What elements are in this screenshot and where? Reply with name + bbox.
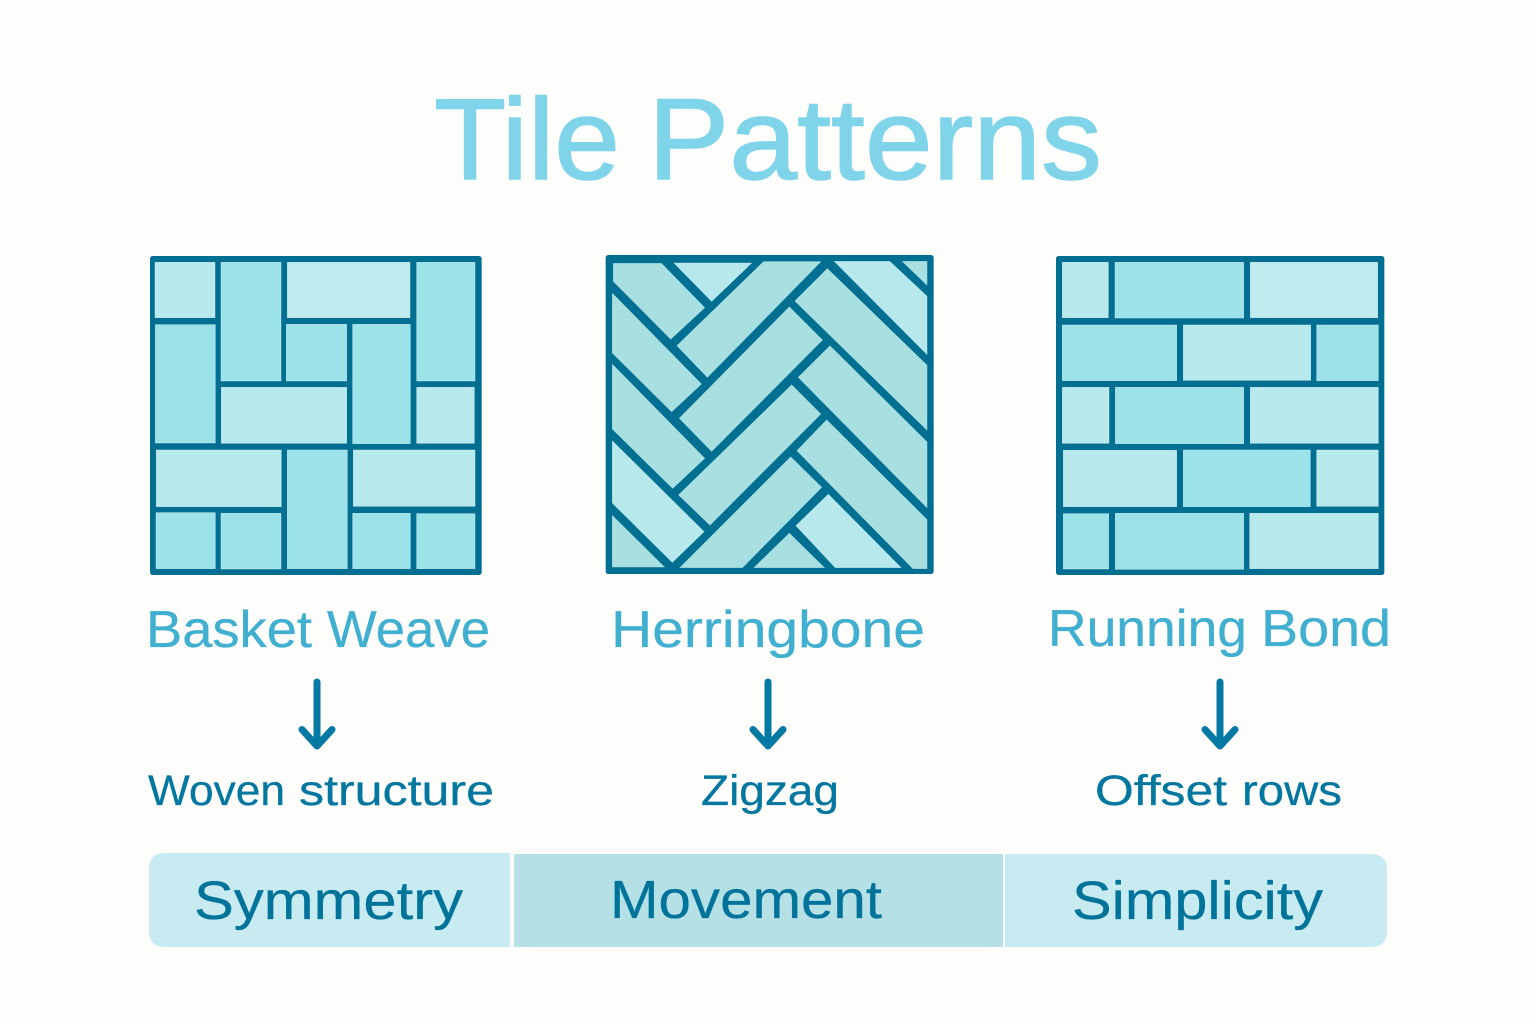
- panel: running bond tile pattern: [1056, 256, 1384, 575]
- label: Running Bond: Bond: [1261, 600, 1391, 658]
- description: Offset rows: [1095, 767, 1342, 815]
- panel: basket weave tile pattern: [150, 256, 482, 575]
- description: Zigzag: Zigzag: [701, 767, 839, 815]
- bar segment: Movement: [514, 854, 1003, 947]
- description: Woven structure: structure: [299, 767, 494, 815]
- bar segment: Movement: Movement: [610, 870, 882, 930]
- arrow: basket weave: [302, 682, 332, 746]
- label: Basket Weave: Basket: [146, 601, 313, 659]
- panel: herringbone tile pattern: [606, 255, 934, 574]
- description: Offset rows: rows: [1242, 767, 1342, 815]
- bar segment: Simplicity: Simplicity: [1072, 871, 1323, 931]
- description: Offset rows: Offset: [1095, 767, 1227, 815]
- label: Basket Weave: [146, 601, 490, 659]
- label: Running Bond: [1048, 600, 1391, 658]
- title: Patterns: [648, 76, 1102, 204]
- arrow: running bond: [1205, 682, 1235, 746]
- label: Basket Weave: Weave: [327, 601, 490, 659]
- title: [434, 76, 1102, 204]
- bar segment: Symmetry: Symmetry: [194, 871, 463, 931]
- description: Woven structure: Woven: [148, 767, 285, 815]
- description: Woven structure: [148, 767, 494, 815]
- label: Herringbone: Herringbone: [611, 601, 925, 659]
- title: Tile: [434, 76, 620, 204]
- arrow: herringbone: [753, 682, 783, 746]
- bar segment: Symmetry: [149, 853, 510, 947]
- bar segment: Simplicity: [1005, 854, 1387, 947]
- label: Running Bond: Running: [1048, 600, 1247, 658]
